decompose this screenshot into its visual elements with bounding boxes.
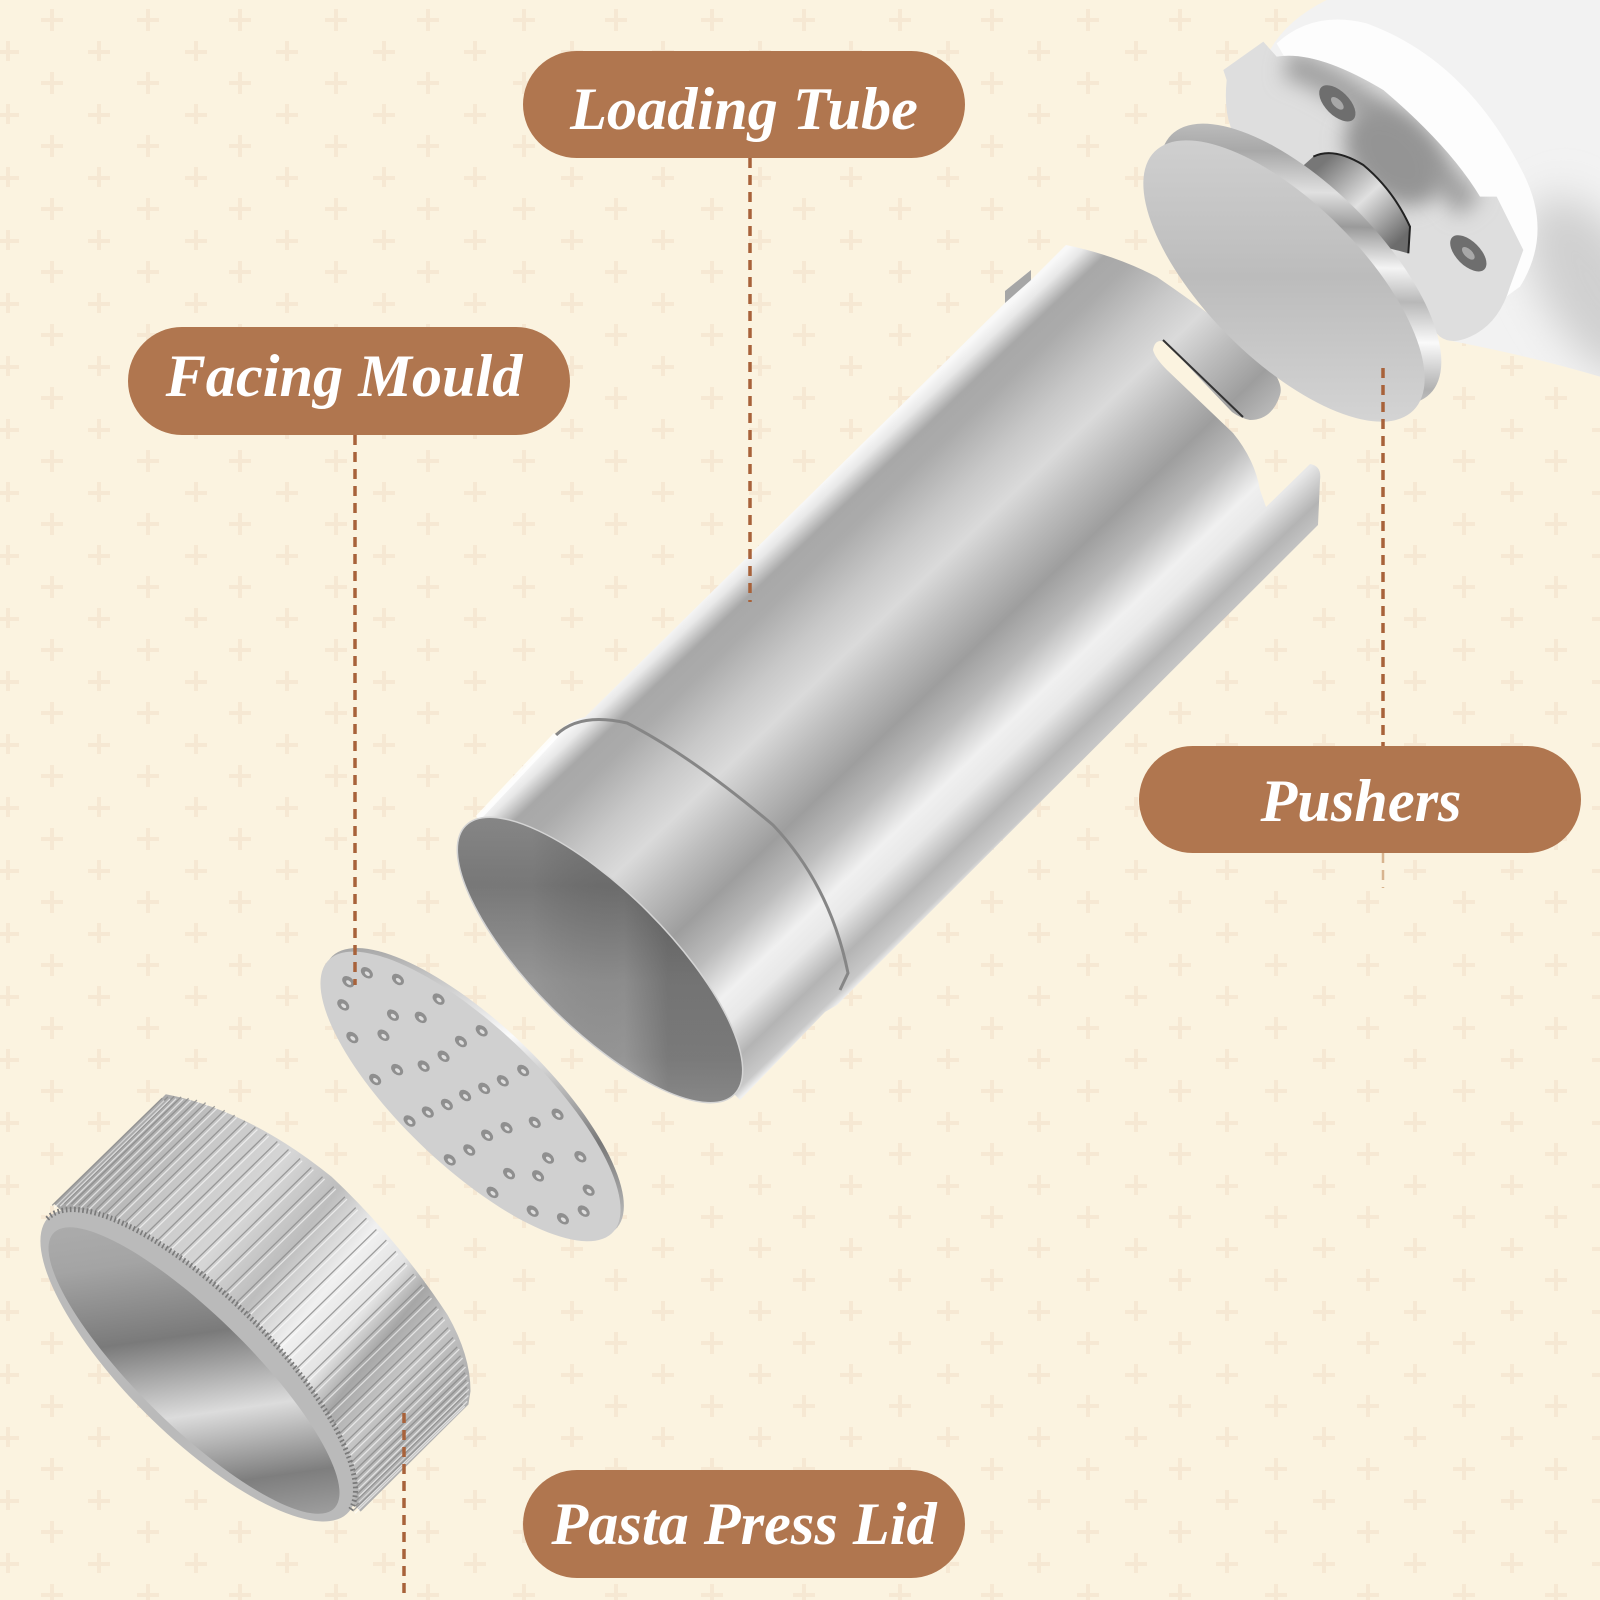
tube mouth (418, 778, 782, 1142)
leader line: loading tube (748, 158, 752, 602)
faded leader line below pushers (1382, 853, 1384, 888)
label: Loading Tube (523, 51, 965, 158)
pusher hub (1223, 42, 1523, 341)
label: Pasta Press Lid (523, 1470, 965, 1578)
mould holes (335, 965, 597, 1227)
label: Pasta Press Lid: Pasta Press Lid (550, 1491, 937, 1558)
leader line: pasta press lid (402, 1413, 406, 1600)
pusher assembly (1143, 0, 1600, 422)
leader line: facing mould (353, 435, 357, 985)
pasta press lid (1, 1094, 471, 1566)
label: Facing Mould (128, 327, 570, 435)
hub screws (1313, 79, 1493, 278)
loading tube (418, 245, 1320, 1142)
facing mould disc (283, 905, 661, 1285)
pusher disk (1099, 80, 1485, 466)
leader line: pushers (1381, 368, 1385, 746)
label: Loading Tube: Loading Tube (569, 76, 918, 143)
label: Pushers: Pushers (1259, 768, 1462, 835)
label: Facing Mould: Facing Mould (165, 343, 523, 410)
label: Pushers (1139, 746, 1581, 853)
knurl ridges (52, 1096, 469, 1513)
